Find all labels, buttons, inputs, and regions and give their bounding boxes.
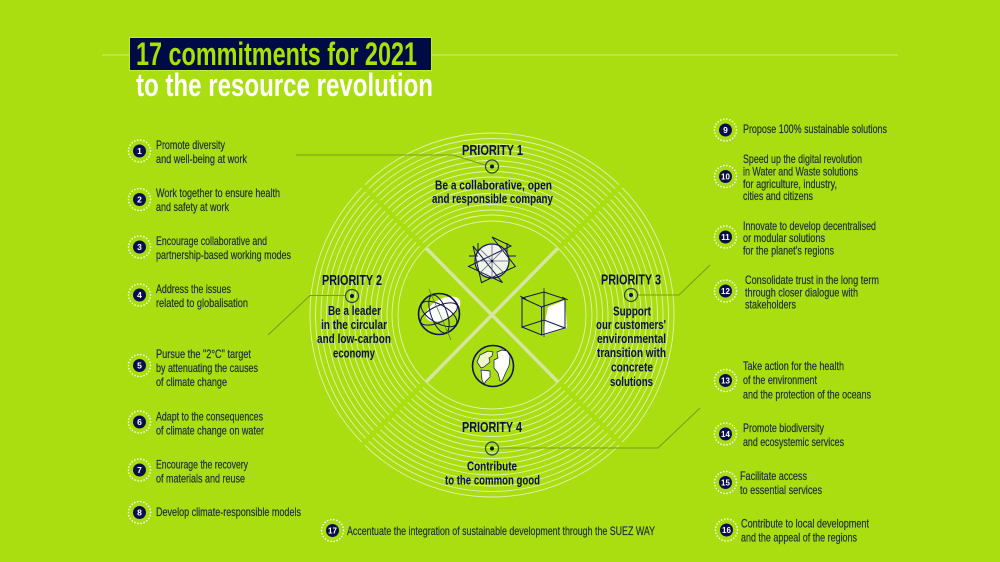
commitment 15: to essential services [740,483,822,497]
commitment 5: Pursue the "2°C" target [156,347,251,361]
panel: priority 3 [596,272,666,389]
commitment 4 [128,282,248,310]
title: to the resource revolution [136,67,433,103]
panel: priority 4: Contribute [467,460,517,474]
commitment 5: 5 [137,360,142,370]
commitment 9: Propose 100% sustainable solutions [743,122,887,136]
commitment 16: and the appeal of the regions [741,530,857,544]
commitment 10: 10 [721,172,730,182]
commitment 4: related to globalisation [156,296,248,310]
connector lines [268,155,710,448]
commitment 16 [716,516,869,544]
commitment 15: Facilitate access [740,469,807,483]
commitment 3: partnership-based working modes [156,248,291,262]
panel: priority 1: Be a collaborative, open [435,178,552,192]
panel: priority 3: PRIORITY 3 [601,272,661,288]
commitment 14: and ecosystemic services [743,435,844,449]
panel: priority 3: our customers' [596,318,666,332]
commitment 13: of the environment [743,373,817,387]
panel: priority 3: transition with [597,346,666,360]
commitment 14: Promote biodiversity [743,421,824,435]
panel: priority 1 [432,143,553,206]
commitment 13: and the protection of the oceans [743,388,871,402]
commitment 15 [714,469,822,497]
panel: priority 3: solutions [610,375,653,389]
commitment 11: 11 [721,233,730,242]
icon: globe [472,346,514,386]
title [130,36,433,103]
commitment 17: Accentuate the integration of sustainable development through the SUEZ WAY [347,524,655,538]
commitment 10 [714,152,862,203]
panel: priority 4: PRIORITY 4 [462,420,522,436]
commitment 1 [128,138,248,166]
icon: cube [520,288,568,337]
commitment 13 [714,359,871,402]
commitment 11 [714,219,876,258]
commitment 7: Encourage the recovery [156,458,248,472]
commitment 6 [128,410,264,438]
panel: priority 4 [445,420,540,488]
commitment 7 [128,458,248,486]
commitment 5 [128,347,258,389]
concentric priority rings [310,133,674,497]
panel: priority 3: concrete [611,360,653,374]
commitment 3: Encourage collaborative and [156,234,267,248]
panel: priority 2: Be a leader [328,304,381,318]
commitment 1: 1 [137,146,142,156]
commitment 4: Address the issues [156,282,231,296]
commitment 6: 6 [137,417,142,427]
commitment 16: 16 [722,526,731,535]
commitment 2: and safety at work [156,200,230,214]
commitment 12: 12 [721,287,730,296]
central cross [426,248,558,382]
panel: priority 1: and responsible company [432,192,553,206]
panel: priority 3: Support [613,304,652,318]
title: 17 commitments for 2021 [136,36,417,72]
commitment 1: Promote diversity [156,138,225,152]
commitment 10: in Water and Waste solutions [743,164,858,178]
icon: sphere [417,289,464,340]
commitment 11: for the planet's regions [743,244,834,258]
commitment 17 [322,520,655,542]
commitment 14 [714,421,844,449]
panel: priority 3: environmental [597,332,666,346]
commitment 17: 17 [328,526,337,536]
commitment 10: cities and citizens [743,189,813,203]
icon: star [469,237,516,283]
commitment 9: 9 [723,125,728,135]
commitment 2 [128,186,280,214]
panel: priority 1: PRIORITY 1 [462,143,523,159]
commitment 7: 7 [137,465,142,475]
commitment 12: through closer dialogue with [745,286,858,300]
commitment 13: 13 [721,376,730,386]
commitment 5: by attenuating the causes [156,361,258,375]
commitment 8 [128,502,301,524]
commitment 10: for agriculture, industry, [743,177,837,191]
commitment 16: Contribute to local development [741,516,869,530]
commitment 2: 2 [137,194,142,204]
commitment 2: Work together to ensure health [156,186,280,200]
panel: priority 2: PRIORITY 2 [322,273,382,289]
commitment 8: 8 [137,508,142,518]
commitment 9 [714,119,887,141]
commitment 3 [128,234,291,262]
panel: priority 4: to the common good [445,474,540,488]
commitment 12 [714,273,879,312]
commitment 6: Adapt to the consequences [156,410,263,424]
panel: priority 2: and low-carbon [317,332,391,346]
panel: priority 2 [317,273,391,360]
commitment 12: stakeholders [745,298,796,312]
commitment 15: 15 [721,478,730,488]
commitment 5: of climate change [156,375,227,389]
commitment 12: Consolidate trust in the long term [745,273,879,287]
commitment 4: 4 [137,290,142,300]
commitment 11: or modular solutions [743,231,825,245]
commitment 3: 3 [137,242,142,252]
commitment 14: 14 [721,430,730,439]
commitment 8: Develop climate-responsible models [156,505,301,519]
panel: priority 2: in the circular [321,318,387,332]
commitment 7: of materials and reuse [156,472,245,486]
panel: priority 2: economy [333,346,375,360]
commitment 11: Innovate to develop decentralised [743,219,876,233]
commitment 13: Take action for the health [743,359,844,373]
commitment 10: Speed up the digital revolution [743,152,862,166]
commitment 1: and well-being at work [156,152,248,166]
commitment 6: of climate change on water [156,424,264,438]
